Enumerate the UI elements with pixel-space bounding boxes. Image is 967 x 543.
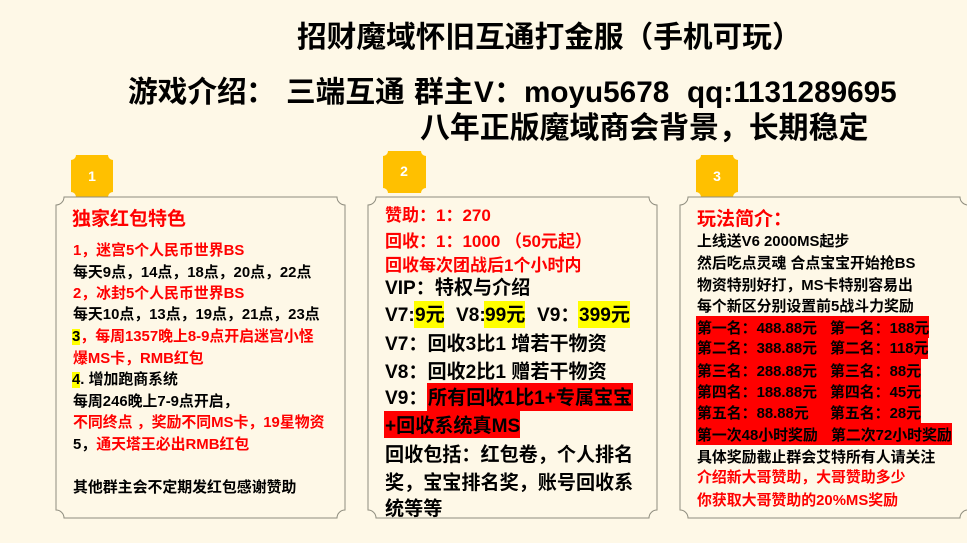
- heading: exclusive red packet features: 独家红包特色: [72, 209, 186, 230]
- VIP benefits: 统等等: [385, 499, 442, 520]
- VIP benefits: V8：回收2比1 赠若干物资: [385, 362, 607, 383]
- subtitle: game introduction and contacts: ：: [246, 76, 276, 109]
- closing notes: 具体奖励截止群会艾特所有人请关注: [697, 450, 935, 466]
- panel 2 frame and badge: [368, 151, 658, 518]
- reward table: 第五名：88.88元: [697, 406, 809, 422]
- panel 2: sponsorship and recycling: [368, 151, 658, 520]
- VIP price highlights: V7:: [385, 305, 415, 326]
- VIP price highlights: V8:: [456, 305, 486, 326]
- VIP price highlights: [385, 301, 630, 328]
- reward table: 第二名：118元: [830, 341, 928, 357]
- VIP benefits: V7：回收3比1 增若干物资: [385, 334, 607, 355]
- subtitle: game introduction and contacts: 三端互通: [286, 76, 405, 109]
- feature list: 3，每周1357晚上8-9点开启迷宫小怪: [72, 329, 314, 345]
- reward table: 第四名：45元: [830, 385, 921, 401]
- feature list: 每天9点，14点，18点，20点，22点: [73, 265, 311, 281]
- feature list: [72, 242, 325, 496]
- subtitle: game introduction and contacts: 游戏介绍: [128, 76, 247, 109]
- heading: gameplay: 玩法简介：: [697, 209, 792, 230]
- title: server name: 招财魔域怀旧互通打金服（手机可玩）: [297, 21, 802, 54]
- VIP price highlights: V9：: [537, 305, 579, 326]
- feature list: 5，通天塔王必出RMB红包: [73, 437, 249, 453]
- reward table: 第二名：388.88元: [697, 341, 817, 357]
- badge number 2: 2: [400, 163, 408, 179]
- feature list: 2，冰封5个人民币世界BS: [73, 286, 244, 302]
- subtitle: game introduction and contacts: moyu5678: [524, 76, 669, 109]
- subtitle: game introduction and contacts: ：: [494, 76, 524, 109]
- VIP price highlights: 399元: [579, 305, 630, 326]
- reward table: 第三名：88元: [830, 364, 921, 380]
- VIP benefits: 奖，宝宝排名奖，账号回收系: [385, 473, 633, 494]
- subtitle: game introduction and contacts: V: [474, 76, 494, 109]
- VIP benefits: [384, 333, 633, 520]
- subtitle: game introduction and contacts: [128, 76, 897, 109]
- VIP benefits: +回收系统真MS: [385, 416, 520, 437]
- gameplay description: 上线送V6 2000MS起步: [697, 234, 849, 250]
- panel 2: sponsorship and recycling: 回收每次团战后1个小时内: [385, 256, 581, 275]
- reward table: 第二次72小时奖励: [831, 428, 952, 444]
- VIP heading: VIP：特权与介绍: [385, 278, 530, 299]
- sponsorship rates: 赞助：1：270: [385, 206, 491, 225]
- feature list: 每天10点，13点，19点，21点，23点: [73, 307, 320, 323]
- VIP price highlights: 9元: [415, 305, 445, 326]
- feature list: 爆MS卡，RMB红包: [73, 351, 204, 367]
- VIP benefits: 所有回收1比1+专属宝宝: [428, 388, 632, 409]
- reward table: 第一次48小时奖励: [697, 428, 818, 444]
- reward table: 第四名：188.88元: [697, 385, 817, 401]
- feature list: 4. 增加跑商系统: [72, 372, 178, 388]
- closing notes: 介绍新大哥赞助，大哥赞助多少: [697, 470, 905, 486]
- reward table: 第一名：188元: [830, 321, 929, 337]
- reward table: 第五名：28元: [830, 406, 921, 422]
- reward table: 第一名：488.88元: [697, 321, 817, 337]
- badge number 1: 1: [88, 168, 96, 184]
- panel 1: exclusive red packets: [56, 155, 346, 518]
- VIP price highlights: 99元: [485, 305, 525, 326]
- gameplay description: [697, 233, 915, 315]
- VIP benefits: V9：: [385, 388, 427, 409]
- subtitle: background statement: 八年正版魔域商会背景，长期稳定: [420, 112, 868, 145]
- feature list: 每周246晚上7-9点开启，: [73, 394, 238, 410]
- gameplay description: 物资特别好打，MS卡特别容易出: [697, 278, 913, 294]
- badge number 3: 3: [713, 168, 721, 184]
- subtitle: game introduction and contacts: qq:1131289695: [687, 76, 897, 109]
- panel 2: sponsorship and recycling: 回收：1：1000 （50元起）: [385, 232, 592, 251]
- feature list: 其他群主会不定期发红包感谢赞助: [73, 480, 296, 496]
- VIP benefits: 回收包括：红包卷，个人排名: [385, 445, 633, 466]
- reward table: 第三名：288.88元: [697, 364, 817, 380]
- gameplay description: 每个新区分别设置前5战斗力奖励: [697, 299, 914, 315]
- gameplay description: 然后吃点灵魂 合点宝宝开始抢BS: [697, 256, 915, 272]
- feature list: 不同终点 ，奖励不同MS卡，19星物资: [73, 415, 325, 431]
- closing notes: 你获取大哥赞助的20%MS奖励: [697, 493, 898, 509]
- panel 1 frame and badge: [56, 155, 346, 518]
- feature list: 1，迷宫5个人民币世界BS: [73, 243, 244, 259]
- subtitle: game introduction and contacts: 群主: [414, 76, 473, 109]
